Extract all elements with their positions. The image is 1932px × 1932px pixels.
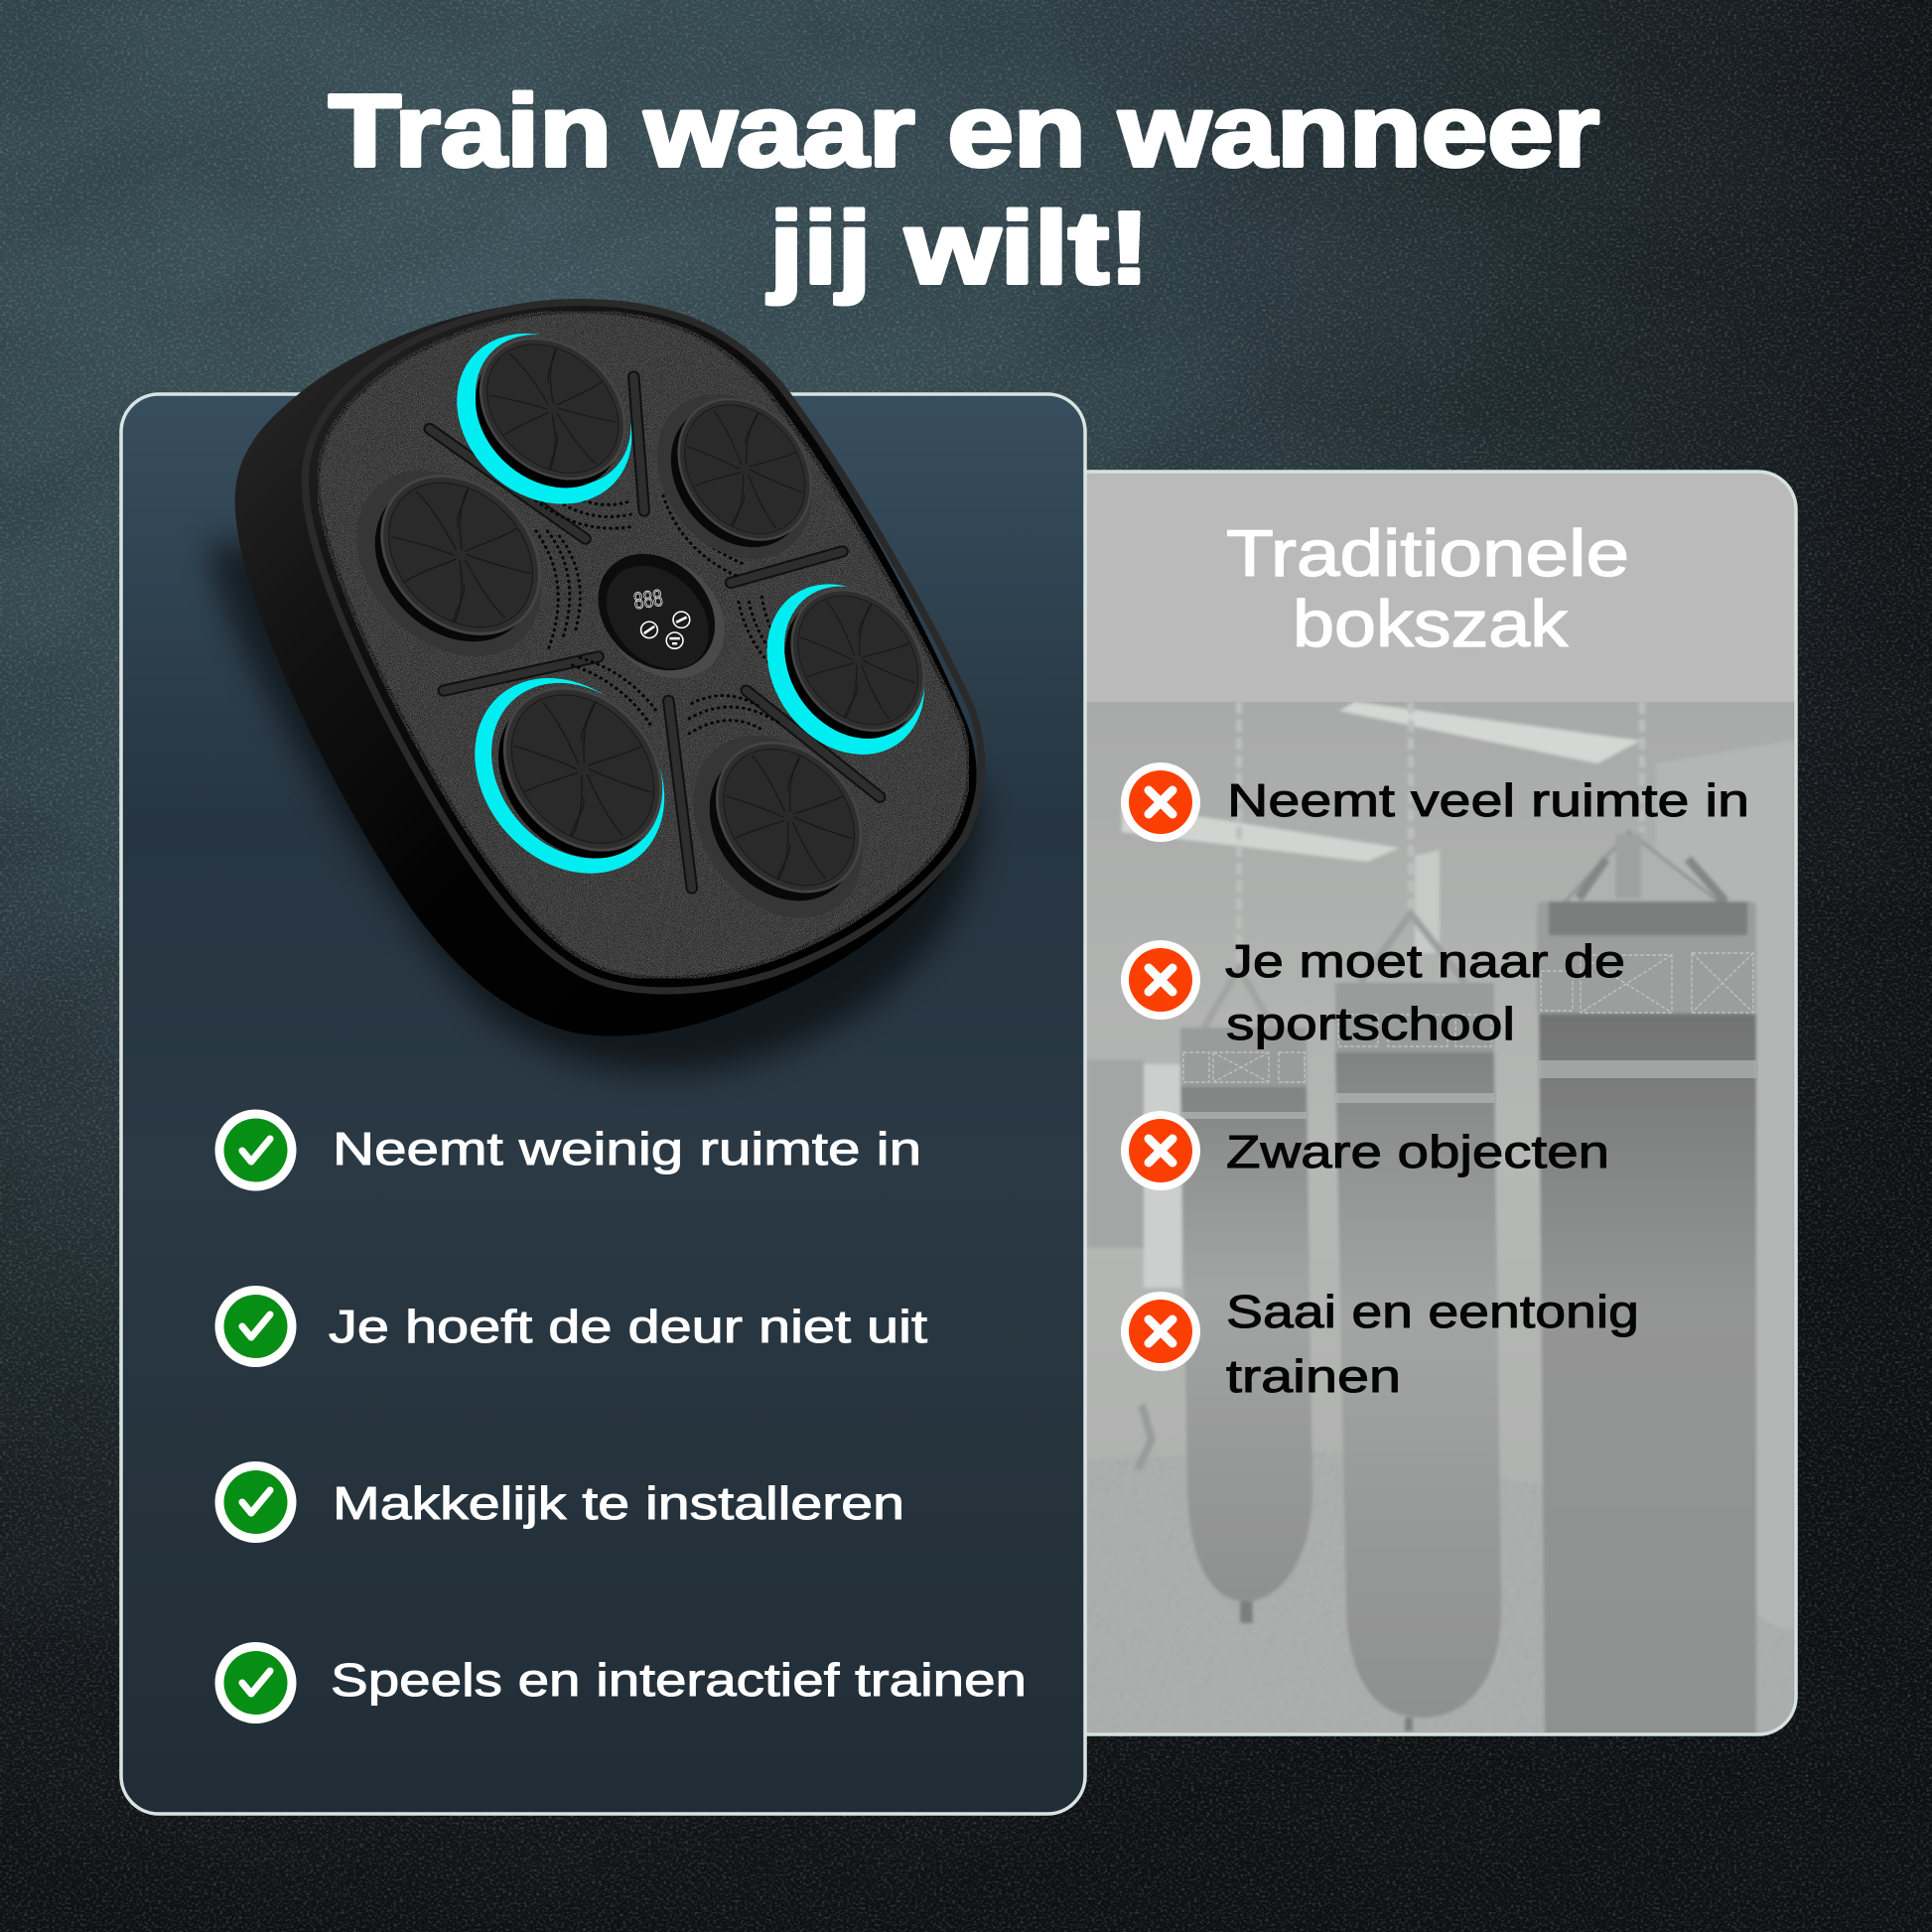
- icon: green check: [214, 1110, 296, 1191]
- panel heading: bokszak: [1293, 587, 1569, 660]
- bag 2: [1360, 913, 1465, 983]
- item: makkelijk te installeren: Makkelijk te installeren: [333, 1477, 904, 1529]
- gym photo background: [1052, 467, 1796, 1747]
- speaker dot patterns: [536, 485, 795, 734]
- pad: top, lit cyan: [447, 310, 653, 516]
- cross grooves: [430, 376, 880, 889]
- item: neemt weinig ruimte in: Neemt weinig ruimte in: [333, 1123, 921, 1174]
- item: je hoeft de deur niet uit: Je hoeft de deur niet uit: [329, 1301, 927, 1352]
- title: jij wilt!: [767, 191, 1150, 305]
- item: je moet naar de sportschool: [1121, 935, 1625, 1049]
- bag 1: [1201, 968, 1276, 1033]
- icon: red cross: [1121, 1292, 1200, 1371]
- item: je moet naar de sportschool: Je moet naar de: [1225, 935, 1625, 987]
- item: je hoeft de deur niet uit: [214, 1286, 927, 1367]
- device face: [318, 312, 969, 978]
- center display: 888: [632, 585, 664, 615]
- icon: green check: [214, 1642, 296, 1724]
- device rim: [305, 302, 981, 991]
- panel: smart boxing machine: [121, 394, 1085, 1814]
- panel heading: Traditionele: [1226, 516, 1629, 590]
- item: zware objecten: Zware objecten: [1226, 1126, 1609, 1177]
- icon: green check: [214, 1461, 296, 1543]
- center display: [574, 531, 750, 703]
- item: zware objecten: [1121, 1111, 1609, 1190]
- item: makkelijk te installeren: [214, 1461, 904, 1543]
- item: saai en eentonig trainen: trainen: [1226, 1350, 1401, 1402]
- device body: [235, 301, 977, 1036]
- pad: left: [319, 435, 579, 692]
- icon: red cross: [1121, 1111, 1200, 1190]
- item: saai en eentonig trainen: [1121, 1286, 1639, 1402]
- item: neemt weinig ruimte in: [214, 1110, 921, 1191]
- pad: right, lit cyan: [758, 565, 951, 763]
- icon: red cross: [1121, 762, 1200, 842]
- product: wall boxing machine: [208, 301, 981, 1073]
- icon: red cross: [1121, 940, 1200, 1020]
- title: Train waar en wanneer: [329, 73, 1599, 188]
- panel: traditional punching bag: [1052, 467, 1796, 1747]
- bag 3: [1564, 830, 1720, 902]
- pad: bottom right: [658, 704, 897, 950]
- item: neemt veel ruimte in: Neemt veel ruimte in: [1227, 774, 1749, 826]
- item: speels en interactief trainen: Speels en interactief trainen: [331, 1654, 1027, 1706]
- drop shadow: [208, 541, 980, 1073]
- item: neemt veel ruimte in: [1121, 762, 1749, 842]
- item: je moet naar de sportschool: sportschool: [1226, 998, 1515, 1049]
- icon: green check: [214, 1286, 296, 1367]
- panel heading: [1226, 516, 1629, 660]
- item: saai en eentonig trainen: Saai en eentonig: [1226, 1286, 1639, 1337]
- pad: top right: [624, 364, 844, 589]
- item: speels en interactief trainen: [214, 1642, 1027, 1724]
- pad: bottom left, lit cyan: [466, 658, 693, 889]
- title: [329, 73, 1599, 305]
